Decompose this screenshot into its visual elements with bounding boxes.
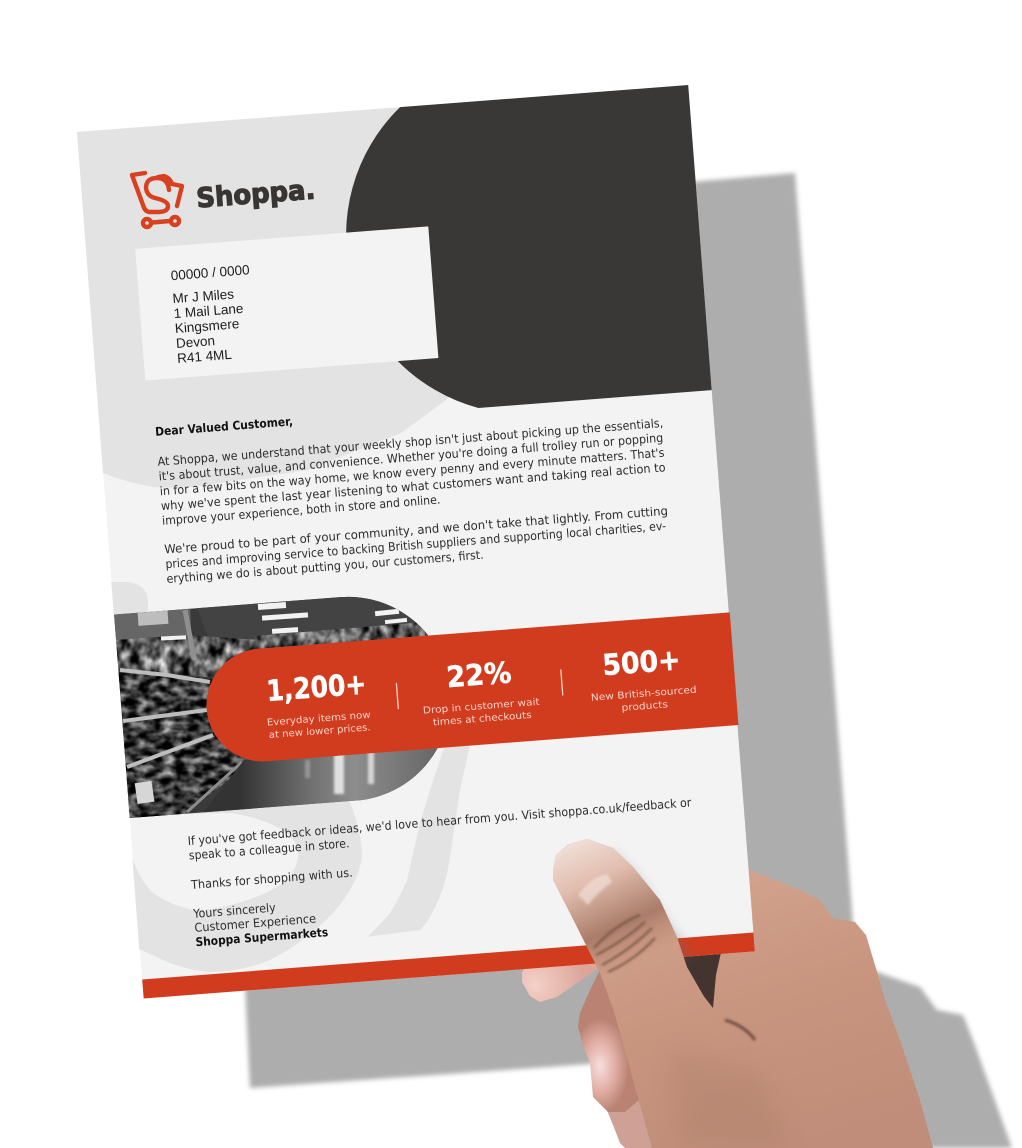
upper shelf goods bbox=[116, 635, 256, 678]
skin crease bbox=[725, 1020, 755, 1040]
logo icon: shopping cart S bbox=[132, 173, 182, 227]
stat: wait times: 22% bbox=[445, 655, 513, 694]
closing text bbox=[186, 795, 700, 949]
floor bbox=[204, 748, 438, 812]
stat: items: at new lower prices. bbox=[268, 722, 371, 741]
stat: suppliers: products bbox=[621, 699, 668, 714]
lower shelf goods bbox=[118, 672, 248, 818]
recipient address: Devon bbox=[175, 333, 216, 351]
address window bbox=[135, 226, 438, 380]
letter paper bbox=[77, 85, 755, 998]
recipient address: 1 Mail Lane bbox=[173, 301, 244, 321]
reference number: 00000 / 0000 bbox=[170, 262, 250, 283]
shelf edges bbox=[120, 670, 242, 812]
stats band bbox=[202, 612, 738, 766]
recipient address: R41 4ML bbox=[177, 347, 233, 366]
recipient address: Kingsmere bbox=[174, 316, 240, 336]
closing text: speak to a colleague in store. bbox=[188, 836, 350, 863]
closing text: If you've got feedback or ideas, we'd love to hear from you. Visit shoppa.co.uk/feedback or bbox=[187, 795, 692, 848]
divider bbox=[396, 683, 399, 709]
paragraph one: improve your experience, both in store and online. bbox=[162, 493, 441, 528]
stat: suppliers: New British-sourced bbox=[591, 685, 697, 704]
price tag bbox=[135, 781, 154, 804]
gap between thumb and hand bbox=[678, 948, 722, 1008]
stat: wait times: Drop in customer wait bbox=[423, 697, 540, 717]
paragraph one: it's about trust, value, and convenience. Whether you're doing a full trolley run or popping bbox=[158, 431, 664, 484]
paragraph two: erything we do is about putting you, our customers, first. bbox=[166, 548, 484, 586]
logo wordmark: Shoppa. bbox=[195, 174, 316, 214]
ceiling lights bbox=[161, 602, 407, 641]
thumb over the letter bbox=[553, 839, 790, 1148]
paragraph two: prices and improving service to backing British suppliers and supporting local charities, ev- bbox=[165, 519, 666, 571]
dark rounded panel bbox=[336, 85, 712, 417]
recipient address bbox=[172, 286, 247, 366]
thumb bbox=[553, 839, 735, 1148]
thumb tip colouring bbox=[553, 839, 687, 1000]
back of the hand bbox=[600, 868, 933, 1148]
index fingertip bbox=[522, 950, 600, 1002]
red footer strip bbox=[142, 932, 755, 998]
stat: items bbox=[263, 666, 372, 741]
paragraph two: We're proud to be part of your community, and we don't take that lightly. From cutting bbox=[164, 504, 668, 557]
closing text: Shoppa Supermarkets bbox=[195, 925, 329, 949]
hand behind the letter bbox=[522, 868, 933, 1148]
divider bbox=[560, 669, 563, 695]
thumb contact shadow bbox=[610, 850, 695, 962]
paragraph one: why we've spent the last year listening to what customers want and taking real action to bbox=[160, 460, 666, 513]
floor reflections bbox=[305, 750, 374, 794]
sign bbox=[138, 610, 168, 626]
store photo bbox=[114, 596, 438, 818]
ceiling bbox=[197, 596, 428, 640]
watermark S shape bbox=[70, 90, 470, 972]
paragraph one: in for a few bits on the way home, we know every penny and every minute matters. That's bbox=[159, 446, 665, 498]
stat: items: Everyday items now bbox=[266, 710, 371, 729]
paragraph one bbox=[157, 416, 668, 528]
stat: suppliers: 500+ bbox=[601, 642, 682, 682]
post bbox=[185, 610, 194, 658]
lower finger bbox=[606, 1095, 660, 1148]
recipient address: Mr J Miles bbox=[172, 286, 235, 306]
far aisle bbox=[255, 622, 425, 648]
stat: wait times: times at checkouts bbox=[432, 710, 532, 728]
paragraph two bbox=[164, 504, 671, 586]
salutation: Dear Valued Customer, bbox=[155, 414, 293, 439]
hand shading bbox=[670, 1050, 790, 1148]
middle finger bbox=[578, 970, 645, 1112]
stat: suppliers bbox=[587, 641, 698, 716]
back wall bbox=[114, 608, 191, 658]
knuckle creases bbox=[594, 915, 655, 972]
closing text: Yours sincerely bbox=[192, 901, 276, 921]
closing text: Thanks for shopping with us. bbox=[190, 866, 353, 892]
stat: items: 1,200+ bbox=[265, 666, 367, 708]
letter content bbox=[77, 85, 756, 998]
thumbnail highlight bbox=[578, 874, 612, 905]
stat: wait times bbox=[419, 653, 541, 729]
closing text: Customer Experience bbox=[194, 911, 317, 935]
paper and hand shadow bbox=[245, 173, 1012, 1148]
paragraph one: At Shoppa, we understand that your weekly shop isn't just about picking up the essentials, bbox=[157, 416, 664, 469]
